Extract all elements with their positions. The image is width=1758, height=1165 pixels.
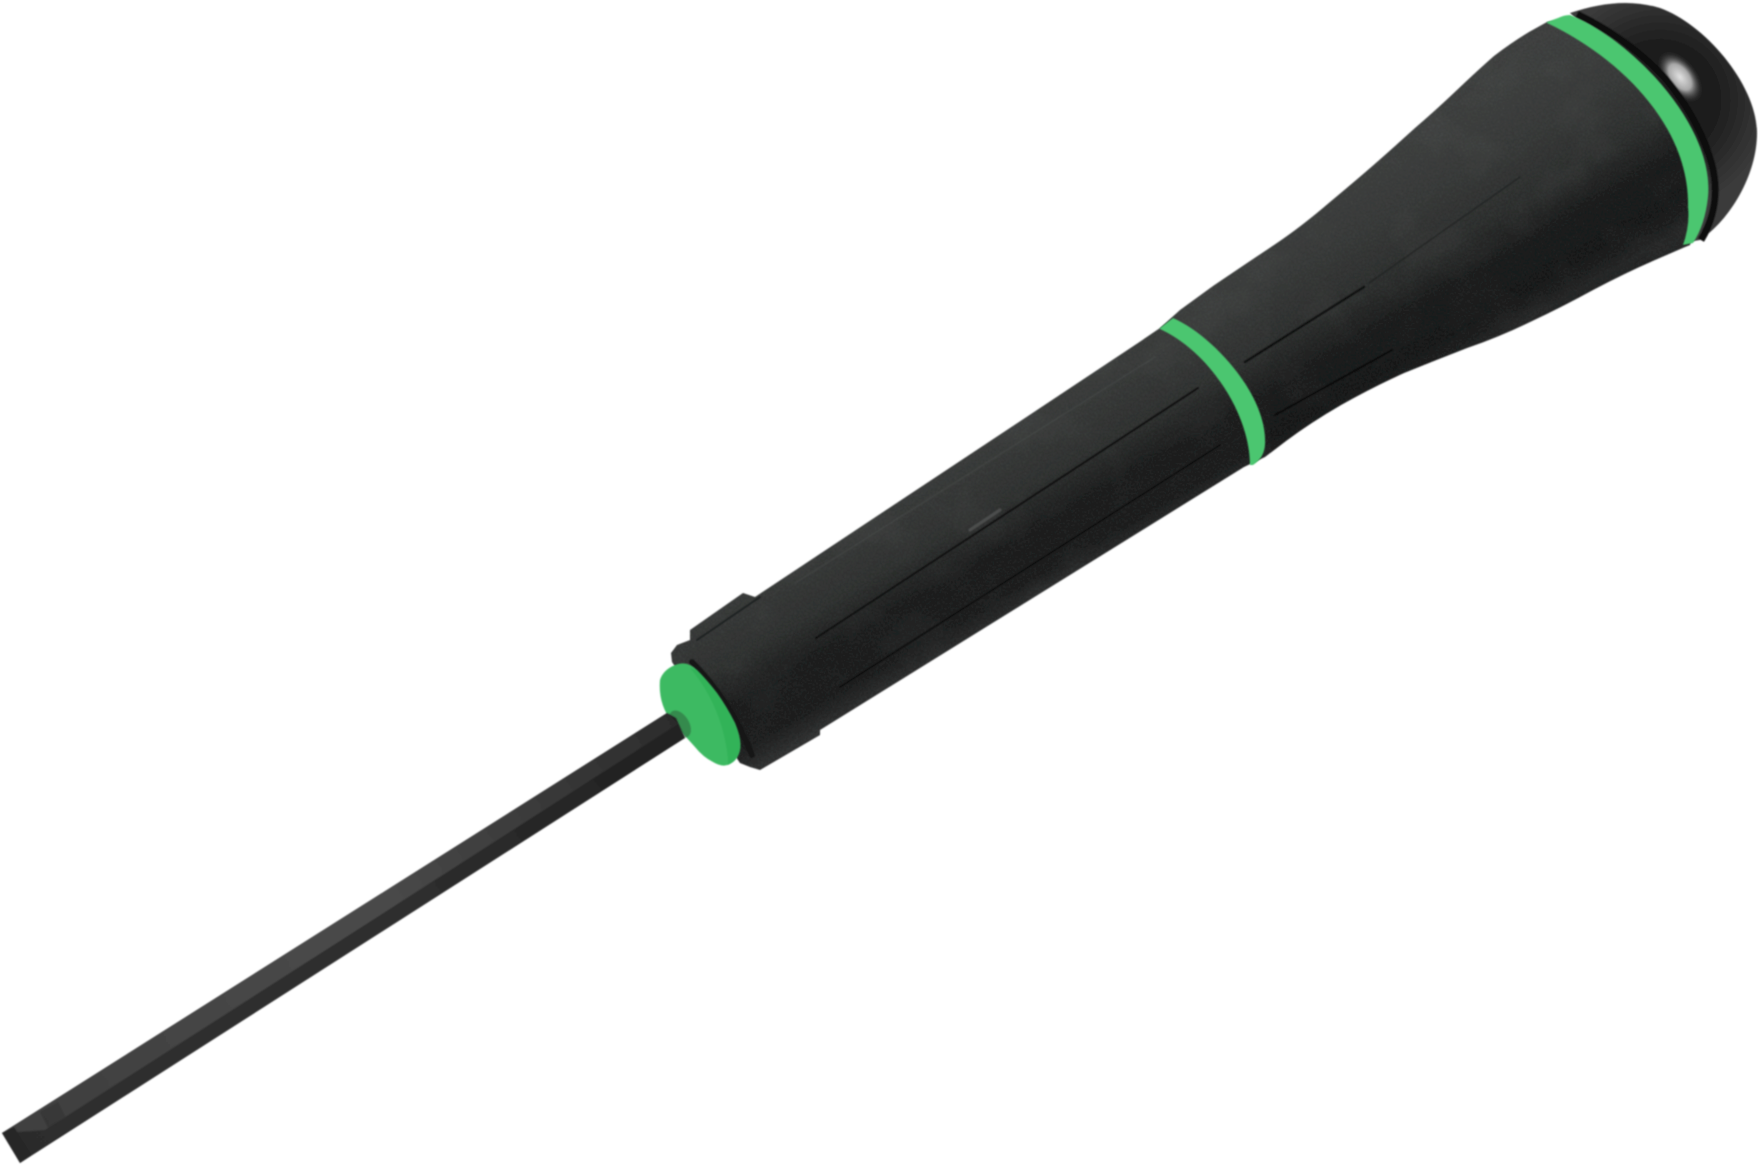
green tip cap <box>660 663 740 766</box>
grip grooves <box>692 177 1520 755</box>
handle shading and texture <box>676 76 1688 763</box>
dome end cap <box>1570 3 1757 242</box>
top green ring <box>1547 15 1708 245</box>
shaft socket <box>664 707 696 741</box>
shaft <box>2 713 685 1163</box>
middle green ring <box>1160 318 1265 465</box>
handle body <box>660 0 1720 780</box>
dark groove <box>1577 14 1715 240</box>
dome highlight <box>1648 43 1712 111</box>
